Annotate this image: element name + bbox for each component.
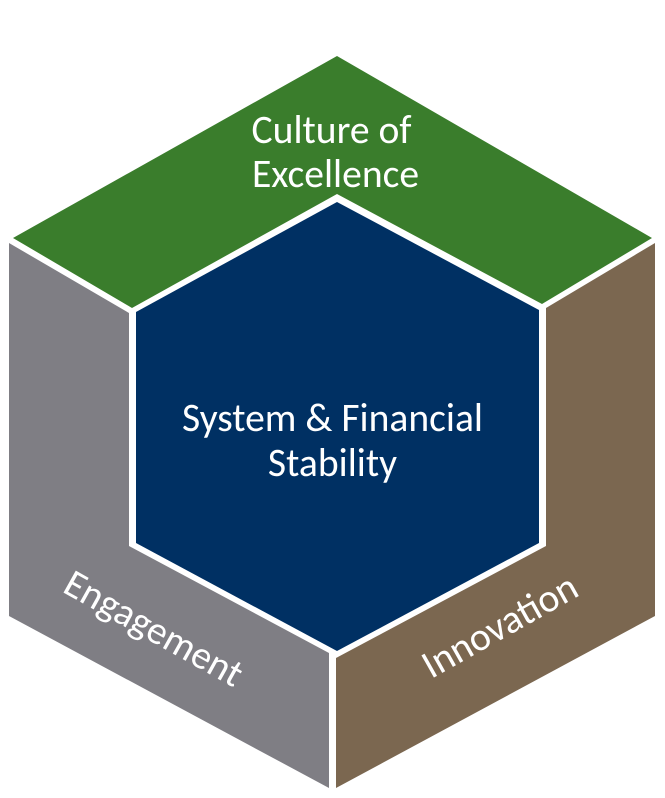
heading: culture of excellence: Culture of [252, 105, 411, 154]
heading: culture of excellence: Excellence [252, 149, 419, 198]
heading: system and financial stability: Stability [268, 438, 397, 487]
heading: engagement: Engagement [56, 559, 252, 697]
panel: system and financial stability [136, 202, 539, 651]
heading: system and financial stability: System & Financial [182, 393, 483, 442]
panel: culture of excellence [13, 56, 652, 308]
heading: innovation: Innovation [412, 562, 586, 689]
